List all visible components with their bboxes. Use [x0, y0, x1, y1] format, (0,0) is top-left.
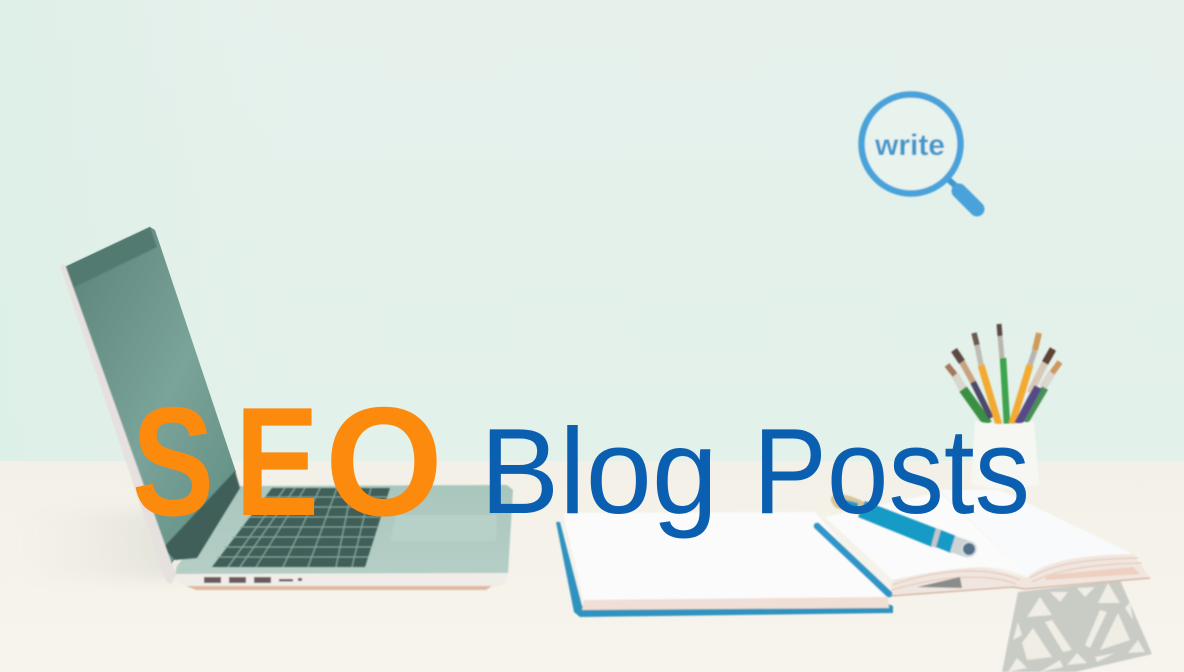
icon: brush cup	[947, 324, 1060, 489]
laptop ports	[204, 577, 302, 583]
icon: teal pen	[831, 494, 976, 558]
brushes	[947, 324, 1060, 425]
white cup	[971, 421, 1039, 489]
title words: Blog Posts: Posts	[753, 403, 1030, 539]
title word: SEO: O	[325, 375, 443, 548]
title words: Blog Posts: Blog	[480, 403, 718, 539]
wall background	[0, 0, 1184, 464]
icon: open book	[825, 490, 1150, 596]
laptop screen	[65, 227, 236, 566]
icon: laptop	[60, 227, 513, 590]
laptop lid edge	[60, 264, 176, 584]
book cover and page block	[890, 553, 1150, 596]
desk surface	[0, 461, 1184, 672]
title word: SEO: E	[235, 375, 319, 548]
icon: magnifying glass with the word write	[862, 94, 977, 209]
right page	[940, 490, 1133, 577]
title	[132, 375, 1030, 548]
magnifier label: write	[874, 129, 945, 162]
laptop trackpad	[390, 515, 497, 541]
laptop keyboard	[212, 488, 390, 567]
laptop hinge	[163, 471, 240, 560]
laptop base	[175, 485, 513, 590]
left page	[825, 492, 1027, 580]
icon: geometric shadow on the desk	[1002, 580, 1152, 672]
icon: blue pencil	[817, 526, 889, 594]
page edge lines	[892, 558, 1142, 590]
icon: blank notebook	[556, 512, 893, 617]
title word: SEO: S	[132, 375, 214, 548]
